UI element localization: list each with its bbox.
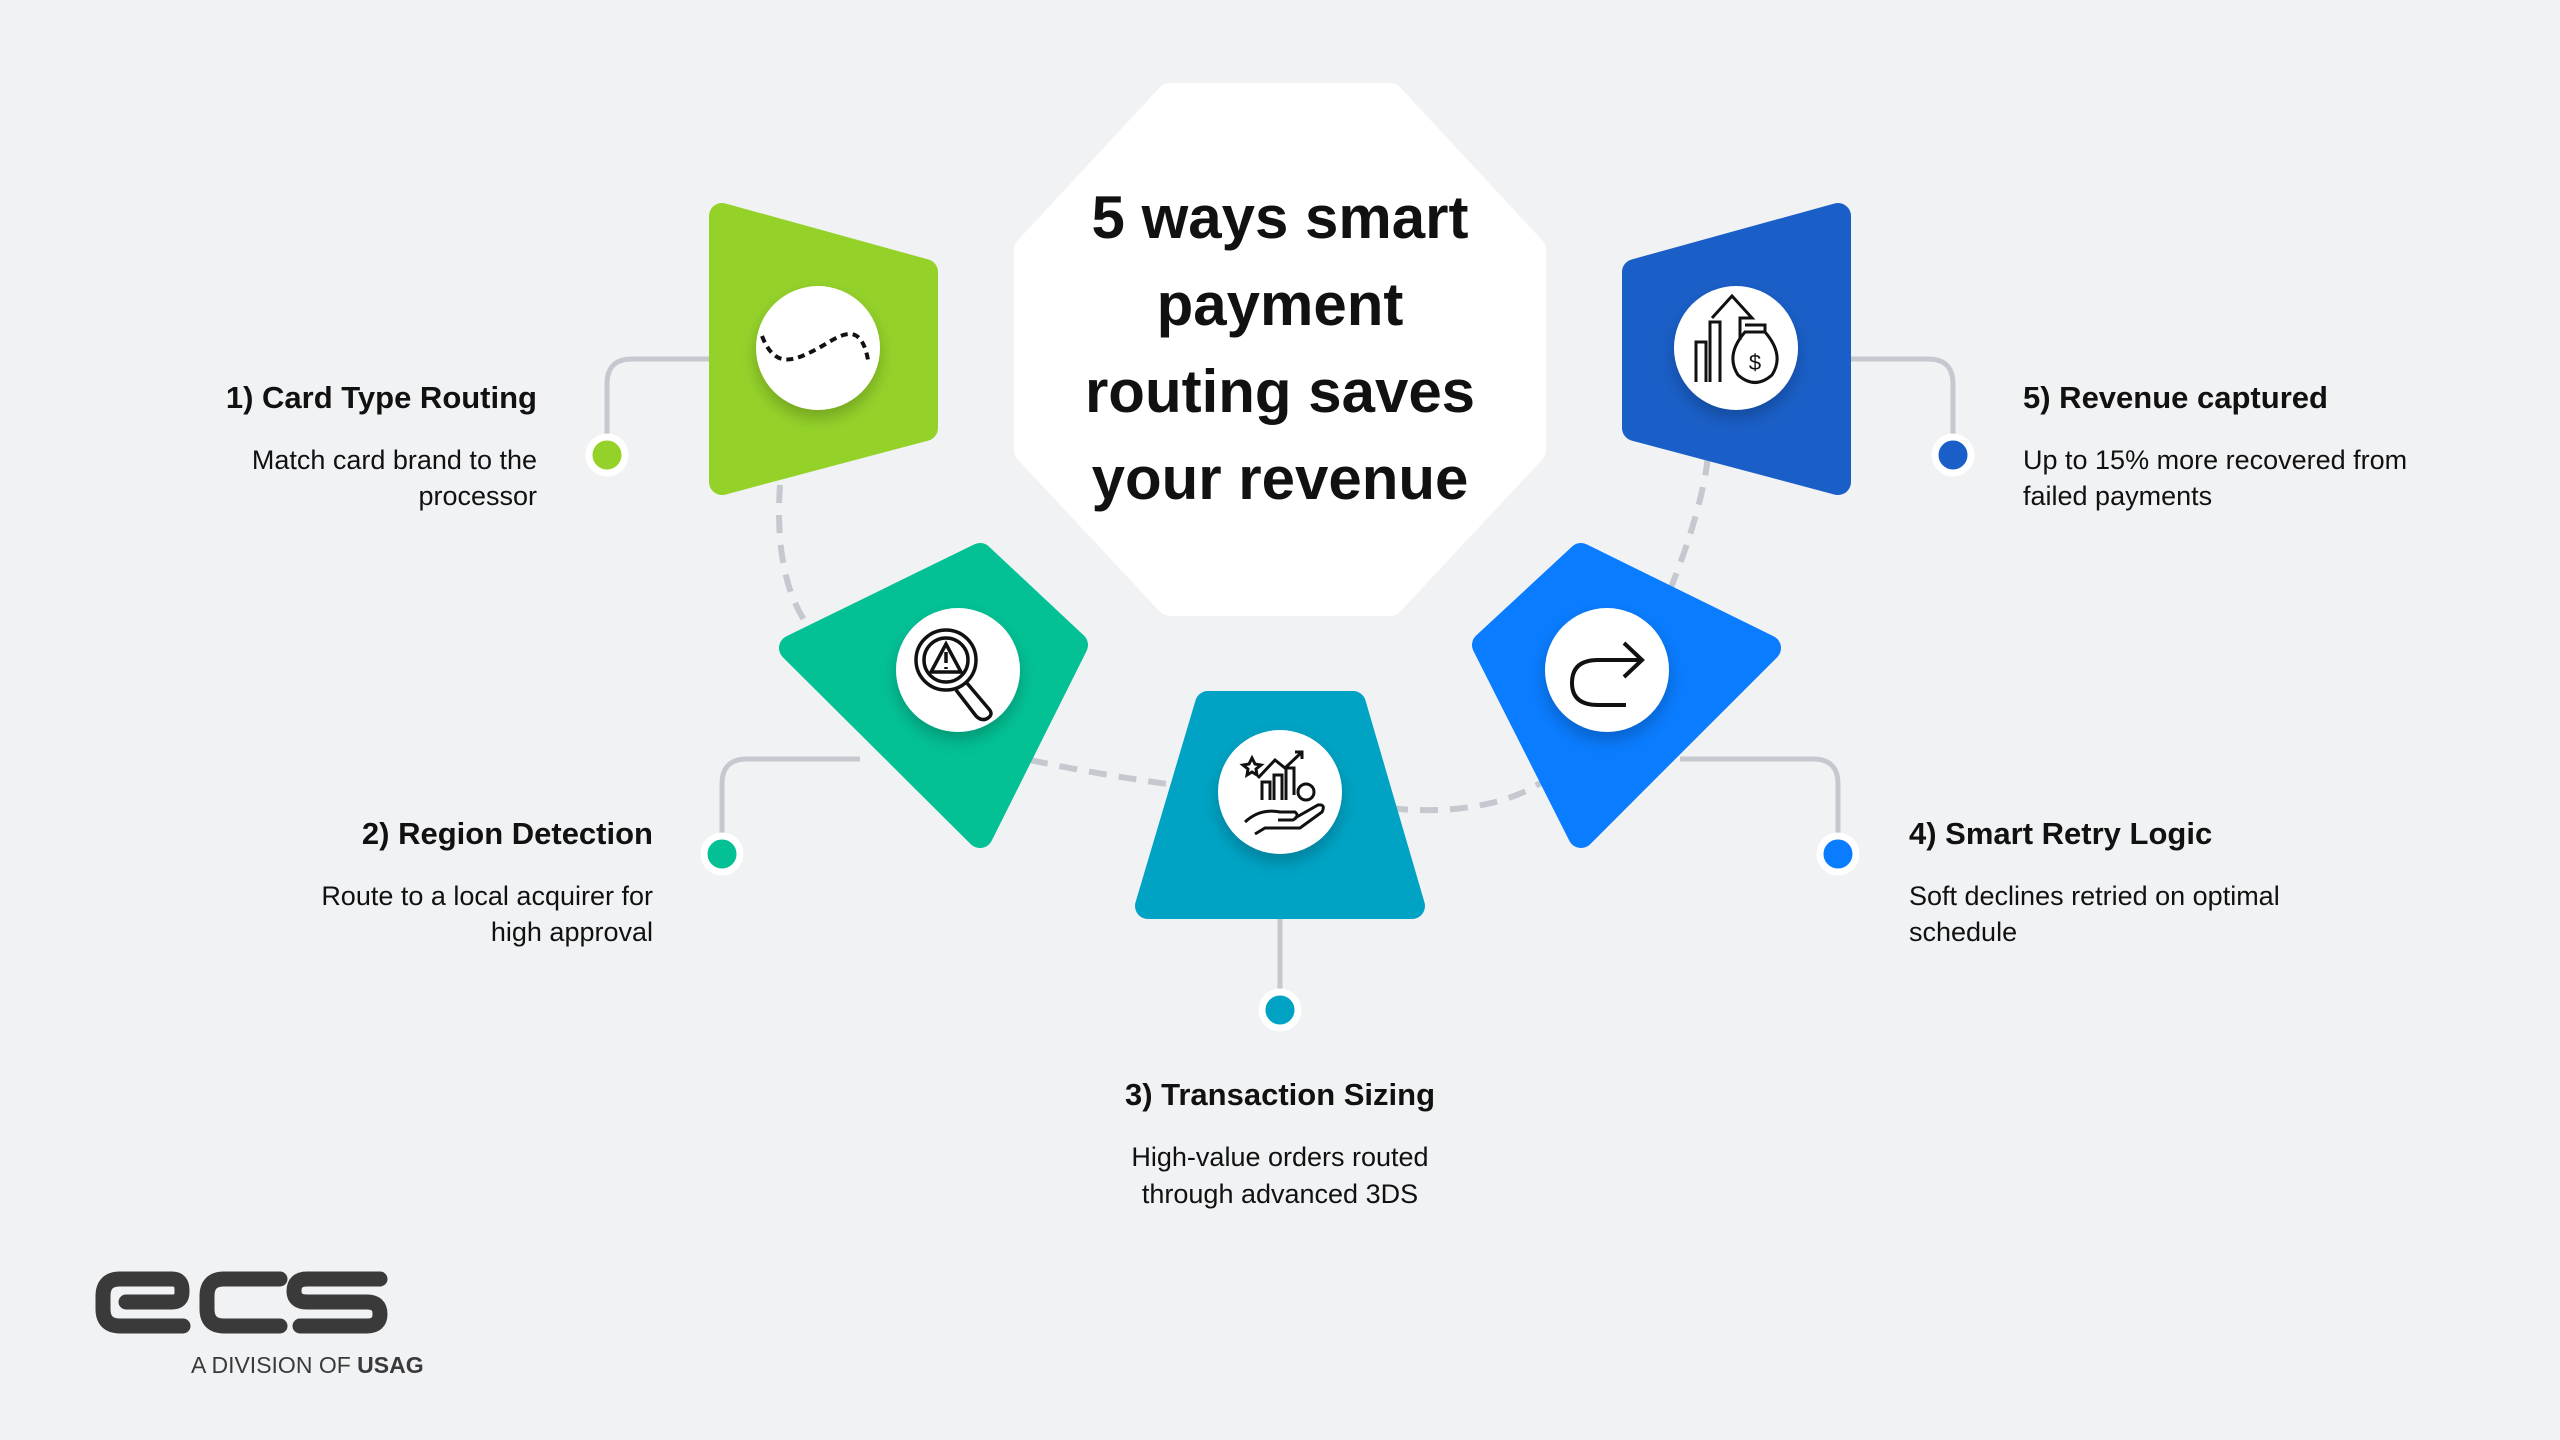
text 2: high approval [491, 917, 653, 947]
card 5: revenue captured [1635, 216, 1838, 482]
title [1085, 184, 1475, 512]
icon: money bag growth [1696, 296, 1777, 382]
icon: money bag growth: $ [1749, 350, 1761, 375]
text 4 [1909, 816, 2280, 947]
text 5 [2023, 380, 2407, 511]
text 1: processor [418, 481, 537, 511]
icon: retry arrow [1572, 643, 1642, 705]
card 3: transaction sizing [1148, 704, 1412, 906]
text 5: 5) Revenue captured [2023, 380, 2328, 415]
text 1: 1) Card Type Routing [226, 380, 537, 415]
icon: magnifier warning [916, 630, 991, 720]
logo: A DIVISION OF USAG [191, 1352, 424, 1378]
text 2 [321, 816, 653, 947]
text 2: 2) Region Detection [362, 816, 653, 851]
text 4: Soft declines retried on optimal [1909, 881, 2280, 911]
card 2: region detection [792, 556, 1075, 835]
logo [103, 1279, 424, 1378]
title: payment [1157, 271, 1403, 338]
text 5: failed payments [2023, 481, 2212, 511]
icon: hand chart [1243, 752, 1323, 834]
icon: dotted route [762, 334, 868, 360]
text 3: through advanced 3DS [1142, 1179, 1418, 1209]
text 4: schedule [1909, 917, 2017, 947]
text 4: 4) Smart Retry Logic [1909, 816, 2212, 851]
dots [589, 437, 1971, 1028]
text 2: Route to a local acquirer for [321, 881, 653, 911]
title octagon [1028, 97, 1532, 602]
text 3: High-value orders routed [1131, 1142, 1429, 1172]
connector lines [607, 359, 1953, 1010]
text 3: 3) Transaction Sizing [1125, 1077, 1435, 1112]
title: your revenue [1092, 445, 1468, 512]
dashed connecting arc [779, 455, 1708, 810]
card 4: smart retry logic [1485, 556, 1768, 835]
text 3 [1125, 1077, 1435, 1209]
text 5: Up to 15% more recovered from [2023, 445, 2407, 475]
title: 5 ways smart [1092, 184, 1468, 251]
title: routing saves [1085, 358, 1475, 425]
text 1: Match card brand to the [252, 445, 537, 475]
text 1 [226, 380, 537, 511]
card 1: card type routing [722, 216, 925, 482]
